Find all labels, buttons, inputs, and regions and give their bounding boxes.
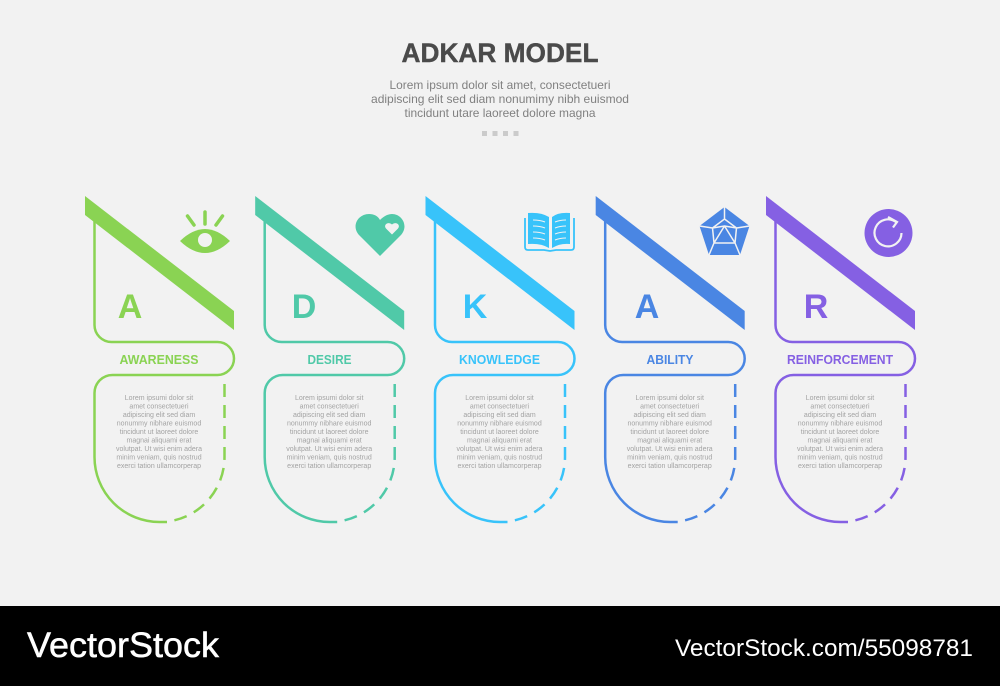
body text: adipiscing elit sed diam <box>463 412 536 419</box>
letter: D <box>292 288 316 326</box>
label: REINFORCEMENT <box>787 352 893 367</box>
icon: heart <box>356 214 404 256</box>
body text: minim veniam, quis nostrud <box>116 454 202 462</box>
body text <box>797 395 883 470</box>
letter: A <box>118 288 142 326</box>
body text <box>116 395 202 470</box>
subtitle text: adipiscing elit sed diam nonumimy nibh euismod <box>371 92 629 106</box>
body text: exerci tation ullamcorperap <box>457 463 542 470</box>
body text: tincidunt ut laoreet dolore <box>801 429 879 436</box>
body text: Lorem ipsumi dolor sit <box>125 395 193 402</box>
body text: minim veniam, quis nostrud <box>797 454 883 462</box>
pagination dots <box>482 131 518 136</box>
body text <box>457 395 543 470</box>
body text: amet consectetueri <box>470 404 530 410</box>
body text: nonummy nibhare euismod <box>798 420 882 428</box>
body text: volutpat. Ut wisi enim adera <box>627 446 713 453</box>
body text: magnai aliquami erat <box>127 438 192 444</box>
body text: exerci tation ullamcorperap <box>117 463 201 470</box>
letter: K <box>463 288 488 326</box>
body text: tincidunt ut laoreet dolore <box>120 429 198 436</box>
title: ADKAR MODEL <box>402 38 598 68</box>
body text: adipiscing elit sed diam <box>293 412 366 419</box>
diagonal band <box>426 196 574 330</box>
icon: book <box>525 213 574 251</box>
footer bar <box>0 606 1000 686</box>
label: DESIRE <box>308 352 352 367</box>
body text <box>627 395 713 470</box>
body text: volutpat. Ut wisi enim adera <box>457 446 543 453</box>
body text: tincidunt ut laoreet dolore <box>630 429 709 436</box>
body text: Lorem ipsumi dolor sit <box>295 395 363 402</box>
outline <box>265 221 404 522</box>
body text: amet consectetueri <box>640 404 700 410</box>
body text: minim veniam, quis nostrud <box>287 454 372 462</box>
subtitle text: tincidunt utare laoreet dolore magna <box>404 106 596 120</box>
outline <box>605 221 745 522</box>
diagonal band <box>766 196 915 330</box>
body text: Lorem ipsumi dolor sit <box>635 395 704 402</box>
icon: refresh circle <box>864 209 912 257</box>
body text: tincidunt ut laoreet dolore <box>290 429 369 436</box>
footer url text: VectorStock.com/55098781 <box>675 635 973 662</box>
body text: magnai aliquami erat <box>297 438 362 444</box>
icon: eye <box>180 212 230 253</box>
body text: minim veniam, quis nostrud <box>457 454 542 462</box>
label: AWARENESS <box>120 352 199 367</box>
outline <box>94 221 234 522</box>
panel: desire <box>255 196 404 522</box>
body text: minim veniam, quis nostrud <box>627 454 712 462</box>
label: KNOWLEDGE <box>459 352 540 367</box>
label: ABILITY <box>646 352 694 367</box>
body text: magnai aliquami erat <box>808 438 873 444</box>
dashed edge <box>344 384 395 520</box>
body text: exerci tation ullamcorperap <box>287 463 371 470</box>
letter: A <box>635 288 659 326</box>
outline <box>776 221 915 522</box>
body text: adipiscing elit sed diam <box>804 412 876 419</box>
body text: exerci tation ullamcorperap <box>798 463 882 470</box>
body text: nonummy nibhare euismod <box>627 420 712 428</box>
body text: nonummy nibhare euismod <box>117 420 201 428</box>
panel: awareness <box>85 196 234 522</box>
body text: nonummy nibhare euismod <box>287 420 372 428</box>
diagonal band <box>85 196 234 330</box>
outline <box>435 221 575 522</box>
diagonal band <box>596 196 745 330</box>
footer logo text: VectorStock <box>27 626 220 665</box>
dashed edge <box>685 384 735 520</box>
body text: tincidunt ut laoreet dolore <box>460 429 539 436</box>
body text: adipiscing elit sed diam <box>123 412 195 419</box>
subtitle text: Lorem ipsum dolor sit amet, consectetueri <box>390 78 610 92</box>
diagonal band <box>255 196 404 330</box>
body text: volutpat. Ut wisi enim adera <box>797 446 883 453</box>
dashed edge <box>514 384 565 520</box>
body text: adipiscing elit sed diam <box>634 412 706 419</box>
body text: volutpat. Ut wisi enim adera <box>116 446 202 453</box>
panel: reinforcement <box>766 196 915 522</box>
panel: knowledge <box>426 196 575 522</box>
body text: magnai aliquami erat <box>637 438 702 444</box>
dashed edge <box>174 384 225 520</box>
body text: amet consectetueri <box>129 404 189 410</box>
body text <box>286 395 372 470</box>
body text: volutpat. Ut wisi enim adera <box>286 446 372 453</box>
dashed edge <box>855 384 906 520</box>
letter: R <box>804 288 828 326</box>
subtitle text <box>371 78 629 120</box>
body text: exerci tation ullamcorperap <box>628 463 712 470</box>
body text: magnai aliquami erat <box>467 438 532 444</box>
body text: nonummy nibhare euismod <box>457 420 542 428</box>
body text: amet consectetueri <box>810 404 870 410</box>
icon: radar pentagon <box>700 207 750 255</box>
body text: Lorem ipsumi dolor sit <box>465 395 534 402</box>
body text: Lorem ipsumi dolor sit <box>806 395 874 402</box>
body text: amet consectetueri <box>300 404 359 410</box>
panel: ability <box>596 196 750 522</box>
